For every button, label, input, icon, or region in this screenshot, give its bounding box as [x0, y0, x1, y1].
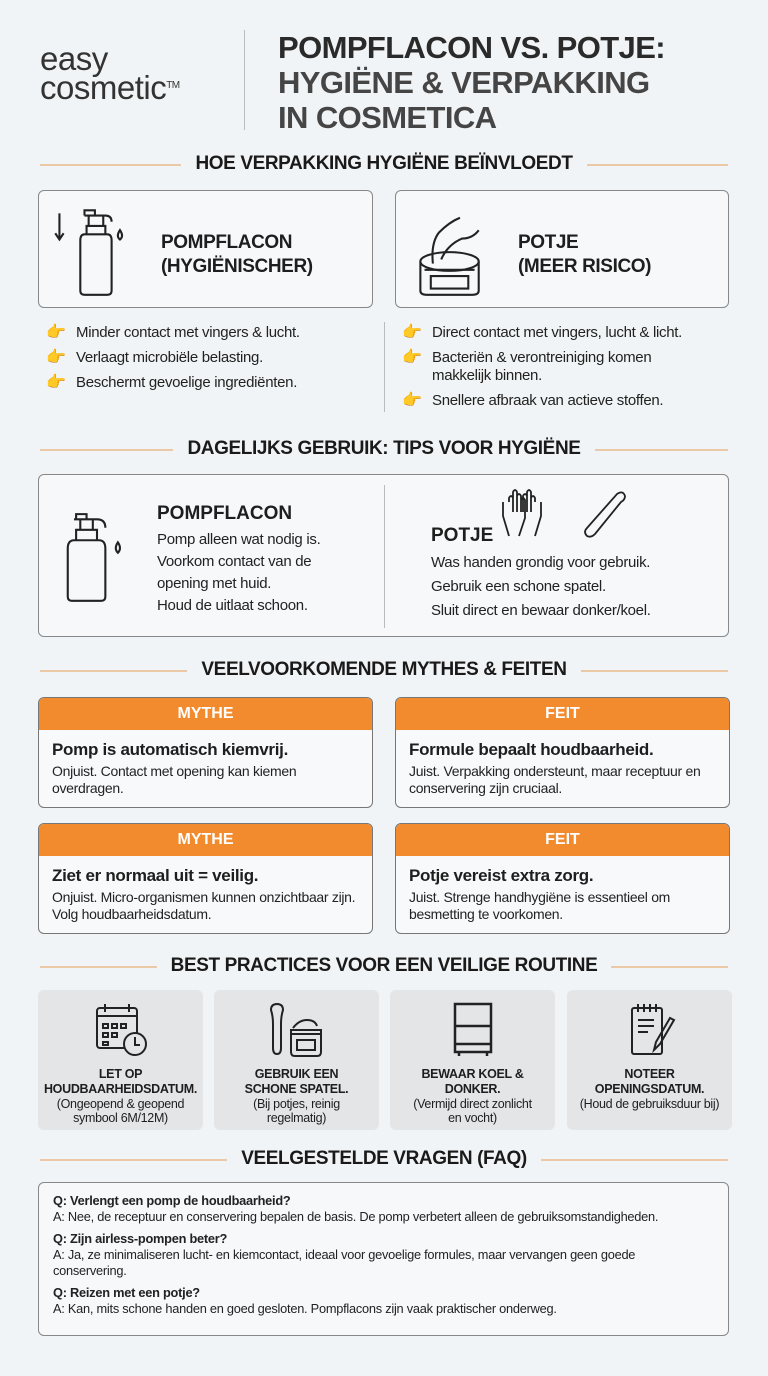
card: fact 1: Juist. Verpakking ondersteunt, maar receptuur en conservering zijn cruciaal.: [409, 763, 700, 796]
card: fact 1: FEIT: [545, 705, 580, 722]
card: expiry date: symbool 6M/12M): [73, 1111, 168, 1125]
panel: faq: A: Nee, de receptuur en conservering bepalen de basis. De pomp verbetert alleen de gebruiksomstandigheden.: [53, 1209, 658, 1224]
panel: faq: [38, 1182, 729, 1336]
card: myth 2: MYTHE: [178, 831, 234, 848]
section heading: hygiene: HOE VERPAKKING HYGIËNE BEÏNVLOEDT: [195, 153, 573, 174]
panel: potje: (MEER RISICO): [518, 256, 651, 277]
title: POMPFLACON VS. POTJE:: [278, 30, 665, 65]
bullets: potje: [404, 324, 682, 409]
card: myth 2: Ziet er normaal uit = veilig.: [52, 866, 258, 885]
card: cool dark: [390, 990, 555, 1130]
card: expiry date: [38, 990, 203, 1130]
panel: faq: Q: Verlengt een pomp de houdbaarheid?: [53, 1193, 290, 1208]
section heading: daily use: DAGELIJKS GEBRUIK: TIPS VOOR HYGIËNE: [187, 438, 581, 459]
title: [278, 30, 665, 135]
card: cool dark: (Vermijd direct zonlicht: [413, 1097, 532, 1111]
title: HYGIËNE & VERPAKKING: [278, 65, 650, 100]
panel: daily tips: POTJE: [431, 525, 493, 546]
icon: spatula and jar: [270, 1003, 322, 1057]
bullets: pompflacon: Minder contact met vingers & lucht.: [76, 324, 300, 341]
panel: daily tips: POMPFLACON: [157, 503, 292, 524]
panel: faq: A: Ja, ze minimaliseren lucht- en kiemcontact, ideaal voor gevoelige formules, maar vervangen geen goede conservering.: [53, 1247, 635, 1278]
icon: hands and spatula: [502, 489, 626, 538]
section heading: myths: VEELVOORKOMENDE MYTHES & FEITEN: [201, 659, 567, 680]
bullets: pompflacon: Verlaagt microbiële belasting.: [76, 349, 263, 366]
card: myth 1: [38, 697, 373, 808]
icon: calendar clock: [96, 1004, 147, 1056]
card: expiry date: LET OP: [99, 1067, 142, 1081]
card: myth 1: MYTHE: [178, 705, 234, 722]
card: myth 2: [38, 823, 373, 934]
panel: pompflacon: [38, 190, 373, 308]
icon: pump: [66, 513, 121, 602]
card: cool dark: DONKER.: [445, 1082, 500, 1096]
card: spatula: GEBRUIK EEN: [255, 1067, 338, 1081]
panel: daily tips: Gebruik een schone spatel.: [431, 578, 606, 595]
card: opening date: OPENINGSDATUM.: [595, 1082, 704, 1096]
icon: jar with finger: [419, 216, 480, 296]
panel: daily tips: Was handen grondig voor gebruik.: [431, 554, 650, 571]
card: opening date: NOTEER: [624, 1067, 675, 1081]
panel: potje: POTJE: [518, 232, 578, 253]
bullets: potje: Snellere afbraak van actieve stoffen.: [432, 392, 663, 409]
panel: daily tips: Pomp alleen wat nodig is.: [157, 531, 320, 548]
panel: daily tips: opening met huid.: [157, 575, 271, 592]
card: expiry date: (Ongeopend & geopend: [57, 1097, 184, 1111]
bullets: potje: Direct contact met vingers, lucht & licht.: [432, 324, 682, 341]
card: fact 1: [395, 697, 730, 808]
panel: daily tips: Sluit direct en bewaar donker/koel.: [431, 602, 651, 619]
logo: easy: [40, 40, 108, 77]
panel: faq: Q: Zijn airless-pompen beter?: [53, 1231, 227, 1246]
card: opening date: [567, 990, 732, 1130]
panel: daily tips: Houd de uitlaat schoon.: [157, 597, 308, 614]
panel: pompflacon: POMPFLACON: [161, 232, 292, 253]
card: myth 1: Pomp is automatisch kiemvrij.: [52, 740, 288, 759]
panel: daily tips: [38, 474, 729, 637]
card: spatula: SCHONE SPATEL.: [245, 1082, 348, 1096]
panel: daily tips: Voorkom contact van de: [157, 553, 311, 570]
panel: faq: Q: Reizen met een potje?: [53, 1285, 200, 1300]
logo: [40, 40, 180, 106]
icon: cabinet: [454, 1002, 492, 1056]
card: spatula: [214, 990, 379, 1130]
title: IN COSMETICA: [278, 100, 496, 135]
card: cool dark: BEWAAR KOEL &: [421, 1067, 524, 1081]
logo: cosmeticTM: [40, 69, 180, 106]
panel: pompflacon: (HYGIËNISCHER): [161, 256, 313, 277]
card: myth 1: Onjuist. Contact met opening kan kiemen overdragen.: [52, 763, 296, 796]
panel: potje: [395, 190, 729, 308]
card: expiry date: HOUDBAARHEIDSDATUM.: [44, 1082, 197, 1096]
card: fact 2: Juist. Strenge handhygiëne is essentieel om besmetting te voorkomen.: [409, 889, 670, 922]
card: fact 2: [395, 823, 730, 934]
card: myth 2: Onjuist. Micro-organismen kunnen onzichtbaar zijn. Volg houdbaarheidsdatum.: [52, 889, 355, 922]
card: fact 2: Potje vereist extra zorg.: [409, 866, 593, 885]
panel: faq: A: Kan, mits schone handen en goed gesloten. Pompflacons zijn vaak praktischer onderweg.: [53, 1301, 557, 1316]
bullets: pompflacon: Beschermt gevoelige ingrediënten.: [76, 374, 297, 391]
bullets: pompflacon: [48, 324, 300, 391]
card: fact 2: FEIT: [545, 831, 580, 848]
card: fact 1: Formule bepaalt houdbaarheid.: [409, 740, 653, 759]
icon: notepad pencil: [631, 1004, 676, 1055]
section heading: best practices: BEST PRACTICES VOOR EEN VEILIGE ROUTINE: [171, 955, 597, 976]
card: spatula: (Bij potjes, reinig: [253, 1097, 340, 1111]
section heading: faq: VEELGESTELDE VRAGEN (FAQ): [241, 1148, 527, 1169]
icon: pump bottle: [54, 209, 124, 296]
card: spatula: regelmatig): [267, 1111, 326, 1125]
card: cool dark: en vocht): [448, 1111, 497, 1125]
card: opening date: (Houd de gebruiksduur bij): [580, 1097, 719, 1111]
bullets: potje: Bacteriën & verontreiniging komen makkelijk binnen.: [432, 349, 651, 384]
